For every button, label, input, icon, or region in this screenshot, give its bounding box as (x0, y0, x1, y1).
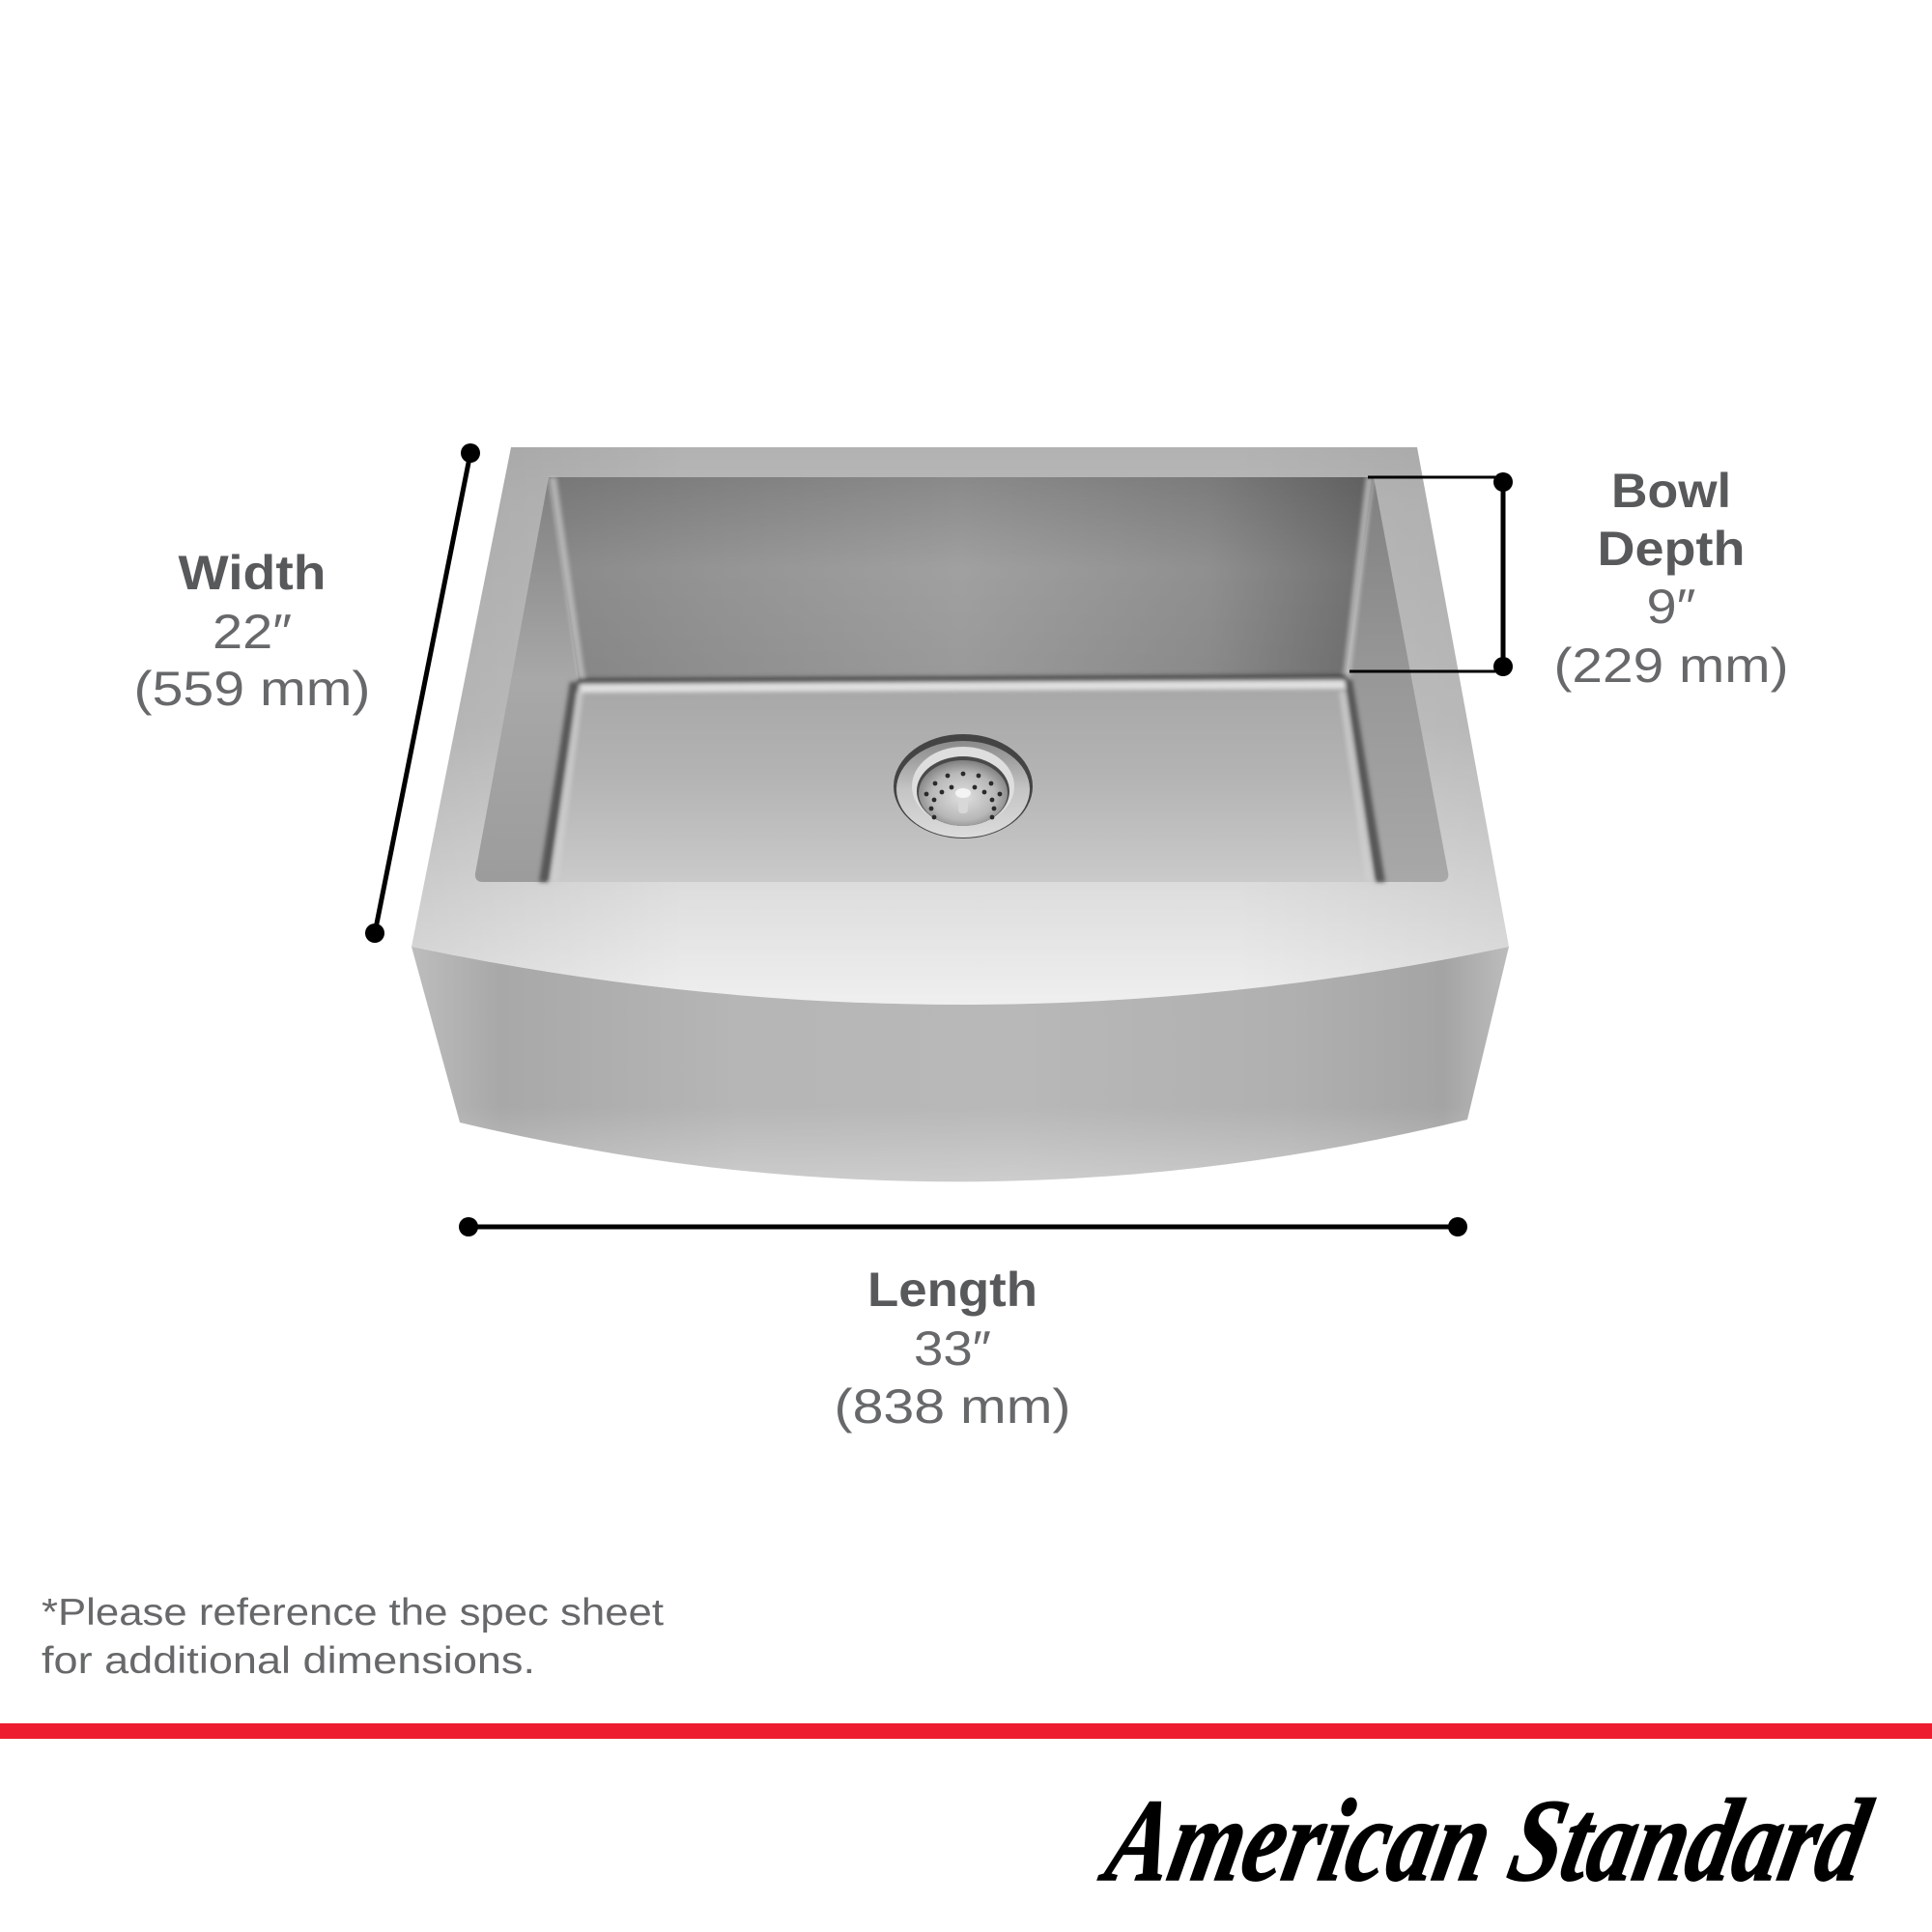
length label (835, 1263, 1070, 1434)
sink apron front (412, 947, 1509, 1181)
width label: 22″ (213, 605, 292, 659)
footnote: *Please reference the spec sheet (42, 1592, 664, 1634)
bowl depth label: (229 mm) (1553, 639, 1789, 693)
bowl depth measure line (1350, 472, 1513, 676)
bowl depth label (1553, 464, 1789, 693)
sink deck (412, 447, 1509, 1005)
width label: (559 mm) (133, 662, 371, 716)
basin right wall (1346, 477, 1448, 882)
red divider bar (0, 1723, 1932, 1739)
bowl depth label: Depth (1598, 522, 1745, 576)
footnote: for additional dimensions. (42, 1640, 535, 1682)
bowl depth label: 9″ (1646, 580, 1696, 634)
dimension: bowl depth (1350, 464, 1789, 693)
length label: Length (867, 1263, 1037, 1317)
width label (133, 546, 371, 716)
length label: 33″ (914, 1321, 991, 1376)
basin (475, 477, 1448, 882)
dimension: length (459, 1217, 1467, 1434)
length label: (838 mm) (835, 1379, 1070, 1434)
width label: Width (178, 546, 327, 600)
drain strainer (894, 734, 1033, 838)
dimension: width (133, 443, 480, 943)
bowl depth label: Bowl (1611, 464, 1731, 518)
width measure line (365, 443, 480, 943)
basin back wall (549, 477, 1374, 680)
length measure line (459, 1217, 1467, 1236)
basin floor (546, 676, 1378, 882)
footnote (42, 1592, 664, 1682)
basin left wall (475, 477, 579, 882)
sink illustration (412, 447, 1509, 1181)
